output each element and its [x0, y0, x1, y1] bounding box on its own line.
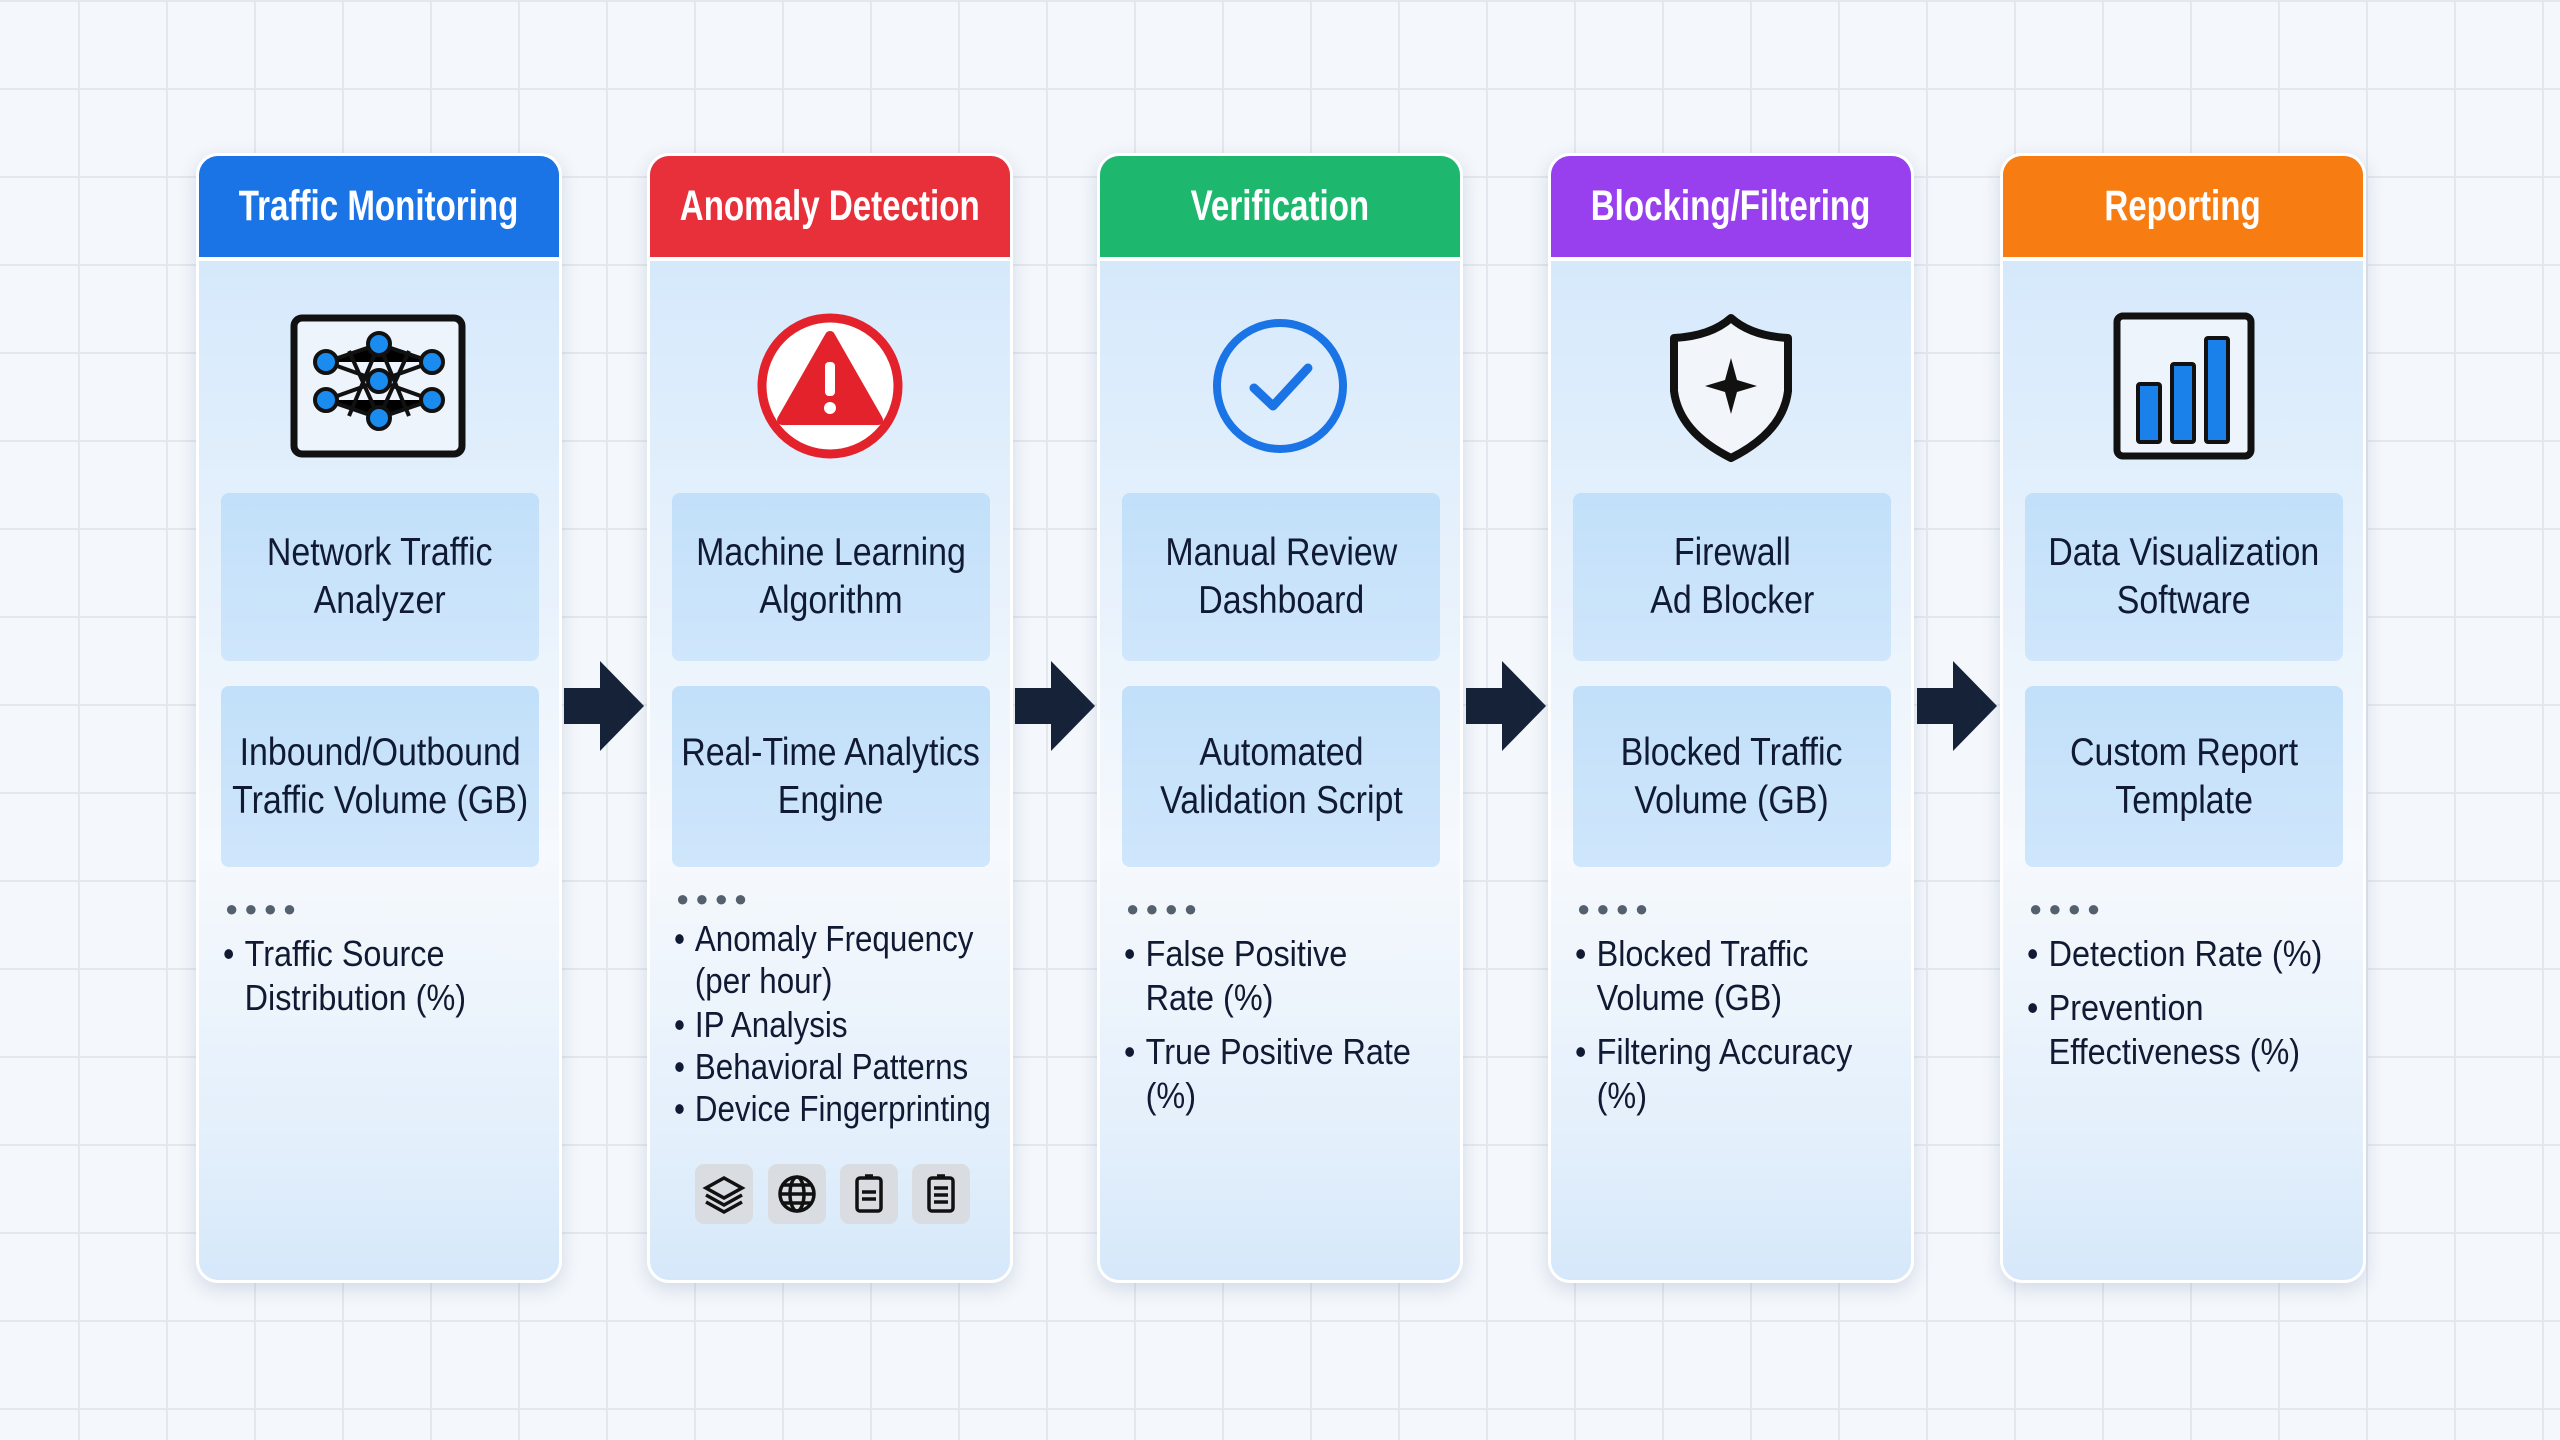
bullet list: Distribution (%) — [245, 977, 466, 1018]
box: metric: Validation Script — [1160, 778, 1402, 822]
box: metric: Real-Time Analytics — [682, 730, 980, 774]
box: metric: Blocked Traffic — [1621, 730, 1843, 774]
box: metric: Volume (GB) — [1635, 778, 1829, 822]
bullet list — [224, 933, 466, 1018]
bullet list: Volume (GB) — [1597, 977, 1782, 1018]
bullet list: Detection Rate (%) — [2049, 933, 2322, 974]
box: tool: Network Traffic — [267, 531, 493, 574]
box: tool — [1573, 493, 1891, 661]
box: tool: Dashboard — [1198, 579, 1364, 622]
box: metric — [1573, 686, 1891, 867]
box: tool: Software — [2117, 579, 2251, 622]
icon: bar chart — [2114, 312, 2254, 460]
bullet list: Rate (%) — [1146, 977, 1273, 1018]
box: tool: Machine Learning — [696, 531, 966, 574]
bullet list: (%) — [1597, 1075, 1647, 1116]
panel: traffic monitoring — [196, 153, 562, 1283]
box: tool: Manual Review — [1165, 531, 1397, 574]
heading: Traffic Monitoring — [199, 156, 559, 261]
box: metric: Automated — [1199, 730, 1363, 774]
box: tool — [221, 493, 539, 661]
icon: shield — [1670, 314, 1792, 462]
box: tool — [2025, 493, 2343, 661]
arrow 1 — [564, 661, 644, 751]
bullet list — [1125, 933, 1411, 1116]
small icon row — [695, 1164, 970, 1224]
bullet list: IP Analysis — [695, 1004, 848, 1045]
box: tool: Data Visualization — [2049, 531, 2319, 574]
heading: Blocking/Filtering: Blocking/Filtering — [1591, 182, 1871, 230]
box: metric: Template — [2115, 778, 2253, 822]
bullet list: (%) — [1146, 1075, 1196, 1116]
dots: ●●●● — [1577, 896, 1654, 921]
bullet list — [2028, 933, 2322, 1072]
bullet list: True Positive Rate — [1146, 1031, 1411, 1072]
heading: Traffic Monitoring: Traffic Monitoring — [239, 182, 519, 230]
bullet list: Device Fingerprinting — [695, 1088, 991, 1129]
bullet list: Effectiveness (%) — [2049, 1031, 2300, 1072]
dots: ●●●● — [1126, 896, 1203, 921]
box: metric — [2025, 686, 2343, 867]
bullet list: Blocked Traffic — [1597, 933, 1809, 974]
bullet list: Prevention — [2049, 987, 2203, 1028]
icon: network graph — [290, 314, 466, 458]
heading: Anomaly Detection — [650, 156, 1010, 261]
box: metric: Inbound/Outbound — [239, 730, 521, 774]
box: tool: Algorithm — [759, 579, 903, 622]
bullet list: Behavioral Patterns — [695, 1046, 968, 1087]
heading: Blocking/Filtering — [1551, 156, 1911, 261]
panel: verification — [1097, 153, 1463, 1283]
arrow 2 — [1015, 661, 1095, 751]
panel: blocking/filtering — [1548, 153, 1914, 1283]
panel: reporting — [2000, 153, 2366, 1283]
icon: alert — [758, 314, 902, 458]
bullet list: Traffic Source — [245, 933, 444, 974]
bullet list: False Positive — [1146, 933, 1347, 974]
icon: check circle — [1213, 319, 1347, 453]
bullet list: Anomaly Frequency — [695, 918, 973, 959]
dots: ●●●● — [2029, 896, 2106, 921]
box: metric — [221, 686, 539, 867]
box: metric — [672, 686, 990, 867]
arrow 3 — [1466, 661, 1546, 751]
box: tool: Firewall — [1674, 531, 1790, 574]
heading: Reporting: Reporting — [2105, 182, 2261, 230]
box: metric — [1122, 686, 1440, 867]
heading: Reporting — [2003, 156, 2363, 261]
heading: Verification: Verification — [1191, 182, 1369, 230]
box: tool — [1122, 493, 1440, 661]
box: tool: Ad Blocker — [1650, 579, 1814, 622]
box: metric: Custom Report — [2070, 730, 2298, 774]
dots: ●●●● — [676, 886, 753, 911]
bullet list: Filtering Accuracy — [1597, 1031, 1852, 1072]
dots: ●●●● — [225, 896, 302, 921]
bullet list — [1576, 933, 1852, 1116]
box: tool: Analyzer — [314, 579, 446, 622]
heading: Verification — [1100, 156, 1460, 261]
box: metric: Traffic Volume (GB) — [232, 778, 528, 822]
panel: anomaly detection — [647, 153, 1013, 1283]
bullet list — [675, 918, 991, 1129]
bullet list: (per hour) — [695, 960, 832, 1001]
box: tool — [672, 493, 990, 661]
box: metric: Engine — [778, 778, 884, 822]
arrow 4 — [1917, 661, 1997, 751]
heading: Anomaly Detection: Anomaly Detection — [680, 182, 980, 230]
